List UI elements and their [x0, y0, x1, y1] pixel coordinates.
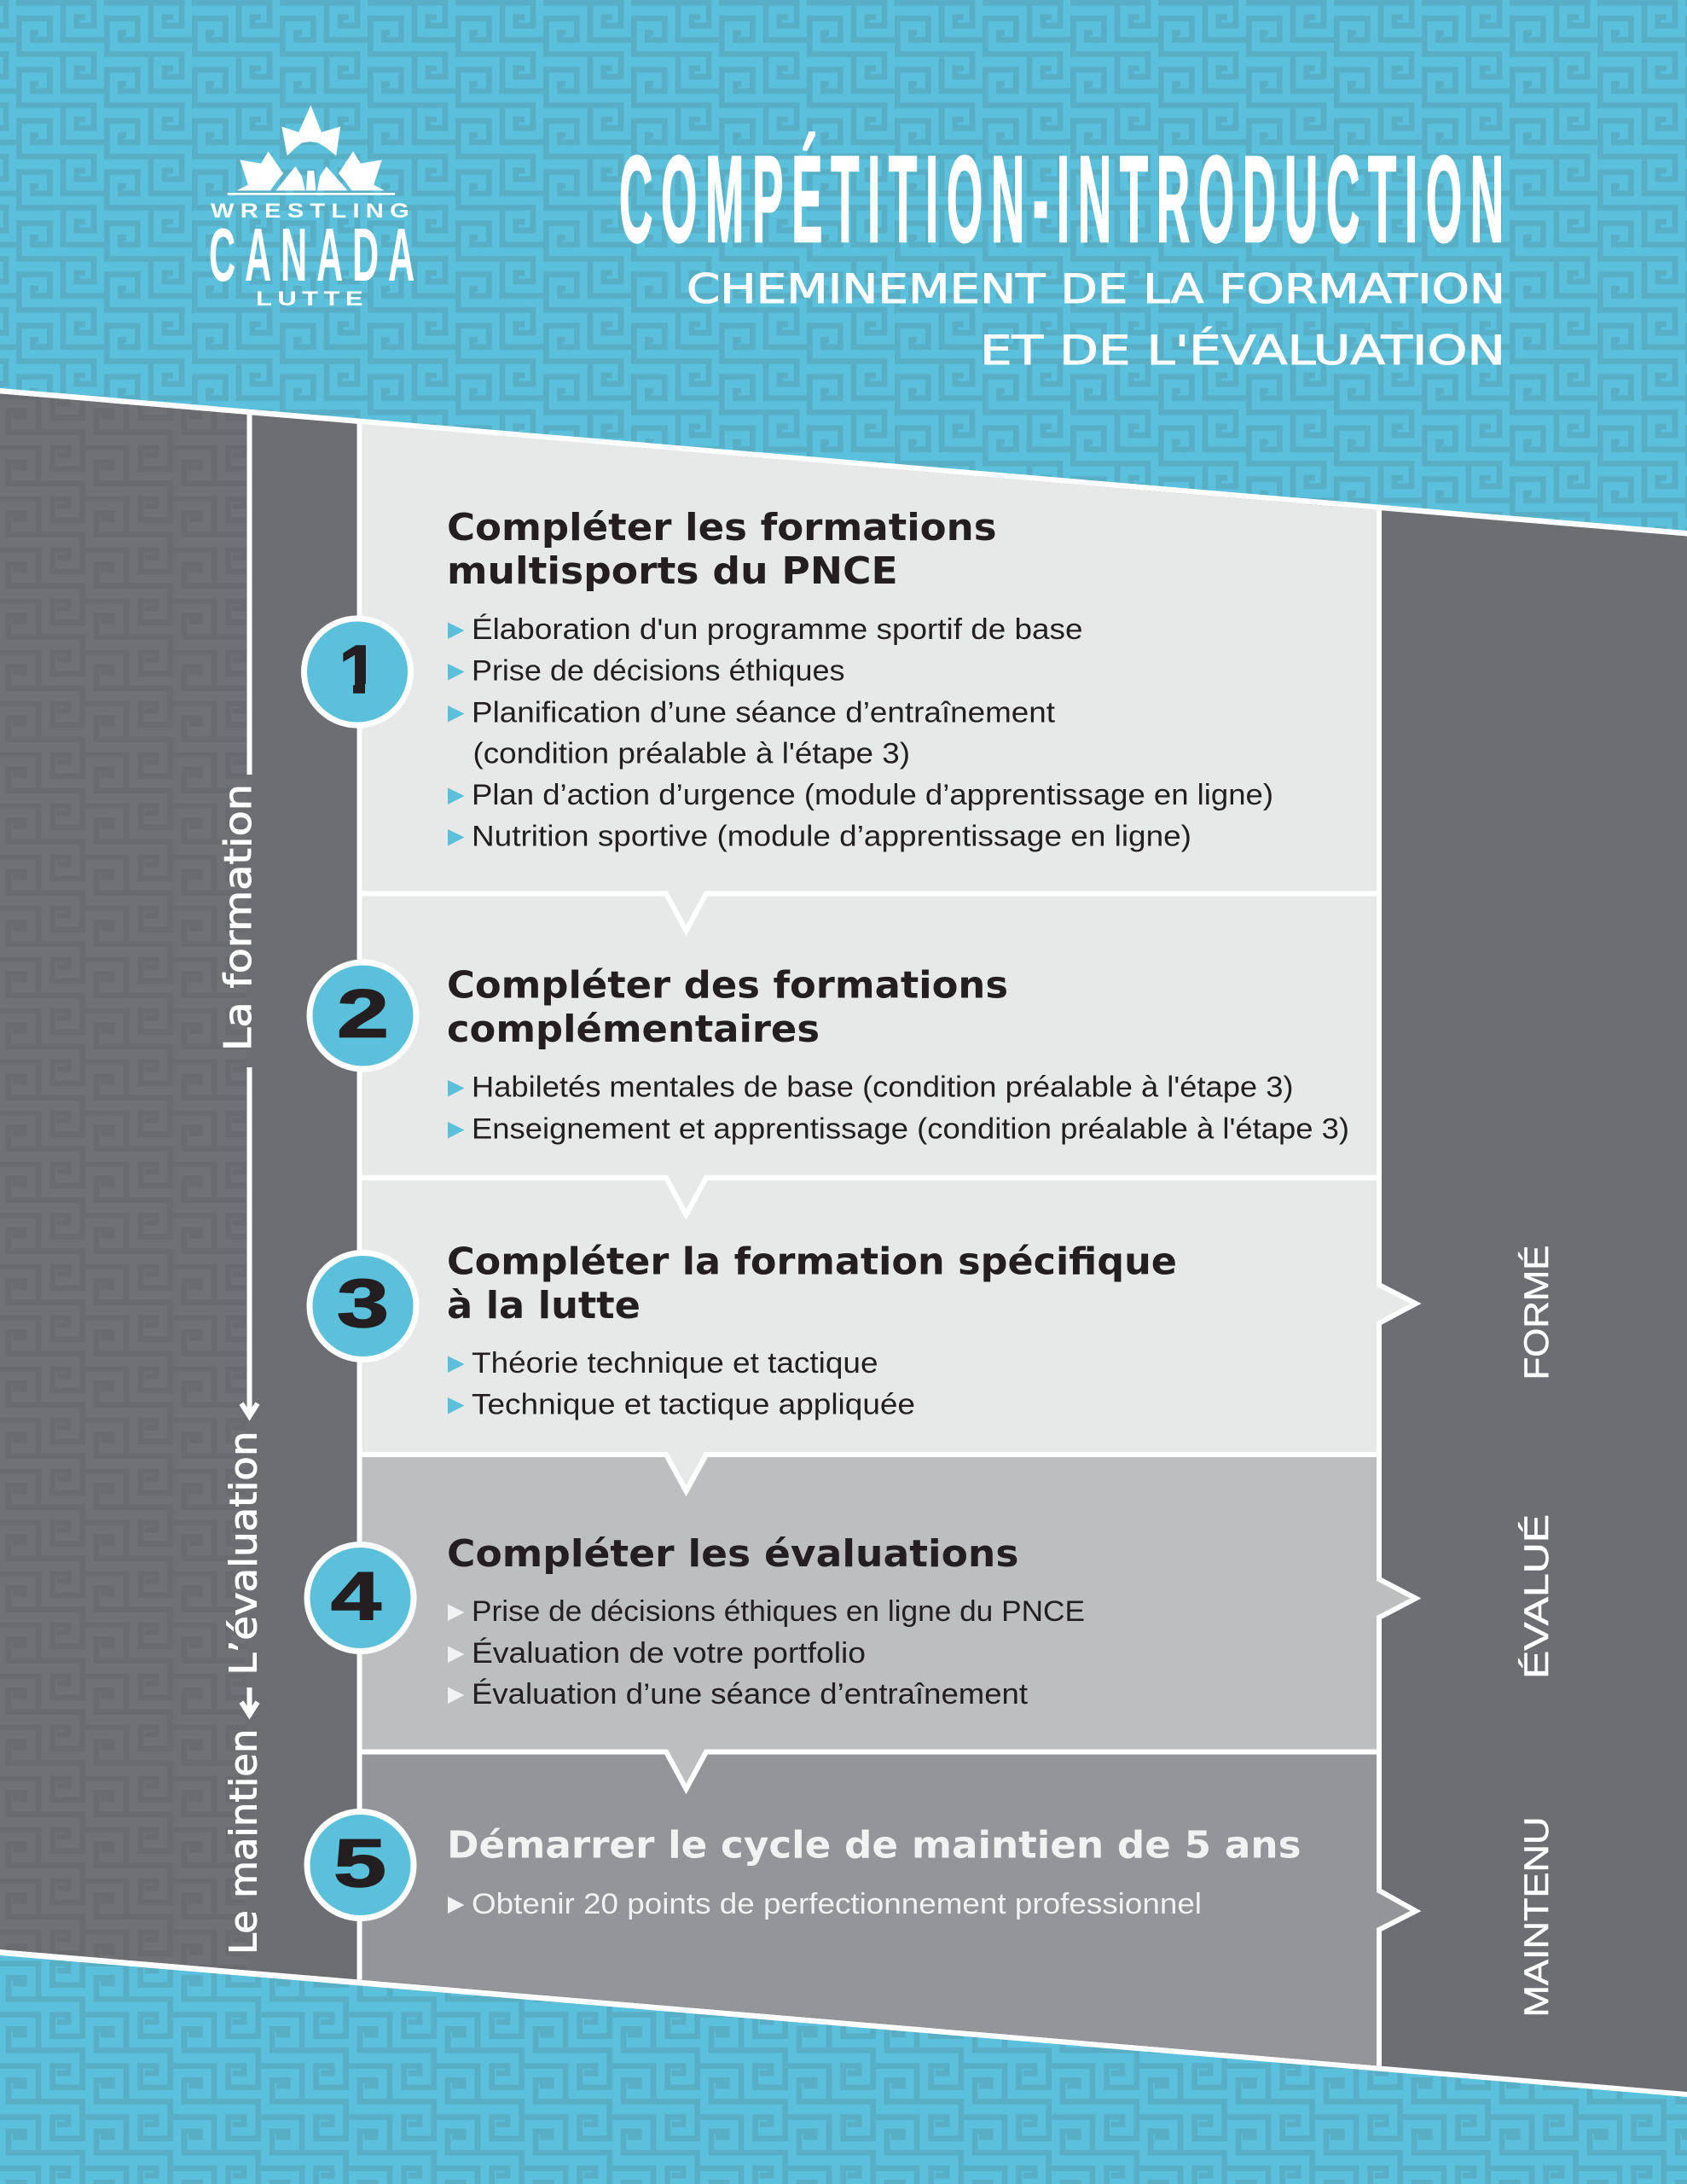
heading: step 3: à la lutte [447, 1284, 641, 1327]
label: maintenu: MAINTENU [1518, 1816, 1556, 2017]
logo word: Wrestling: WRESTLING [211, 200, 415, 223]
label: le maintien: Le maintien [222, 1728, 266, 1955]
list: step 3: Technique et tactique appliquée [472, 1389, 915, 1421]
list: step 2: Enseignement et apprentissage (condition préalable à l'étape 3) [472, 1112, 1349, 1145]
step number 4 [307, 1544, 414, 1652]
label: la formation: La formation [217, 784, 260, 1051]
subtitle: ET DE L'ÉVALUATION [980, 328, 1505, 375]
arrow: toward maintenance [241, 1687, 258, 1715]
text: CANADA [209, 212, 424, 297]
step number 3 [310, 1252, 416, 1360]
heading: step 3: Compléter la formation spécifique [447, 1240, 1177, 1283]
heading: step 2: Compléter des formations [447, 964, 1008, 1007]
slanted white band [0, 388, 1687, 2097]
background: lower key pattern [0, 1945, 1687, 2184]
left column: progression labels [217, 415, 266, 1955]
left grey patterned strip [0, 394, 246, 1970]
list: step 5: Obtenir 20 points de perfectionnement professionnel [472, 1888, 1202, 1920]
list: step 4: Prise de décisions éthiques en ligne du PNCE [472, 1595, 1085, 1628]
subtitle: CHEMINEMENT DE LA FORMATION [687, 266, 1505, 313]
step number 5 [307, 1812, 414, 1918]
list: step 2: Habiletés mentales de base (condition préalable à l'étape 3) [472, 1072, 1293, 1104]
step number 3: 3 [337, 1265, 389, 1341]
list: step 1 [448, 613, 1273, 853]
list: step 4 [448, 1595, 1085, 1711]
panel: step 4 [307, 1455, 1416, 1789]
step number 1: 1 [339, 631, 379, 707]
heading: step 4: Compléter les évaluations [447, 1532, 1018, 1576]
heading: step 2 [447, 964, 1008, 1051]
arrow: toward evaluation [241, 1067, 258, 1416]
list: step 1: Prise de décisions éthiques [472, 655, 844, 688]
icon: maple leaf and wrestler [228, 105, 395, 195]
slanted grey band [0, 394, 1687, 2092]
step number 1 [304, 619, 411, 725]
list: step 3: Théorie technique et tactique [472, 1347, 878, 1380]
heading: step 1 [447, 506, 996, 593]
logo: Wrestling Canada Lutte [209, 105, 424, 311]
right column: status labels [1517, 1246, 1556, 2017]
arrow: training line [247, 415, 252, 775]
heading: step 1: Compléter les formations [447, 506, 996, 549]
subtitle [687, 266, 1505, 375]
list: step 1: Planification d’une séance d’entraînement [472, 696, 1056, 729]
step number 5: 5 [333, 1825, 386, 1901]
panel: step 2 [310, 894, 1379, 1215]
panel: step 1 [304, 424, 1379, 931]
step number 2: 2 [337, 976, 389, 1051]
panel: step 3 [310, 1177, 1416, 1491]
list: step 4: Évaluation de votre portfolio [472, 1637, 866, 1670]
step number 2 [310, 962, 416, 1069]
list: step 1: Nutrition sportive (module d’apprentissage en ligne) [472, 821, 1191, 853]
list: step 3 [448, 1347, 915, 1421]
heading: step 2: complémentaires [447, 1008, 820, 1051]
step number 4: 4 [331, 1558, 382, 1634]
label: évalué: ÉVALUÉ [1517, 1514, 1556, 1679]
list: step 1: Plan d’action d’urgence (module d’apprentissage en ligne) [472, 779, 1273, 811]
heading: step 1: multisports du PNCE [447, 549, 898, 593]
label: formé: FORMÉ [1517, 1246, 1556, 1380]
list: step 1: (condition préalable à l'étape 3) [472, 737, 910, 770]
panel: step 5 [307, 1752, 1416, 2066]
list: step 4: Évaluation d’une séance d’entraînement [472, 1678, 1029, 1711]
heading: step 3 [447, 1240, 1177, 1327]
list: step 2 [448, 1072, 1349, 1145]
list: step 1: Élaboration d'un programme sportif de base [472, 613, 1083, 646]
heading: step 5: Démarrer le cycle de maintien de 5 ans [447, 1824, 1301, 1867]
logo word: Lutte: LUTTE [256, 288, 368, 311]
label: l'évaluation: L’évaluation [222, 1432, 266, 1676]
